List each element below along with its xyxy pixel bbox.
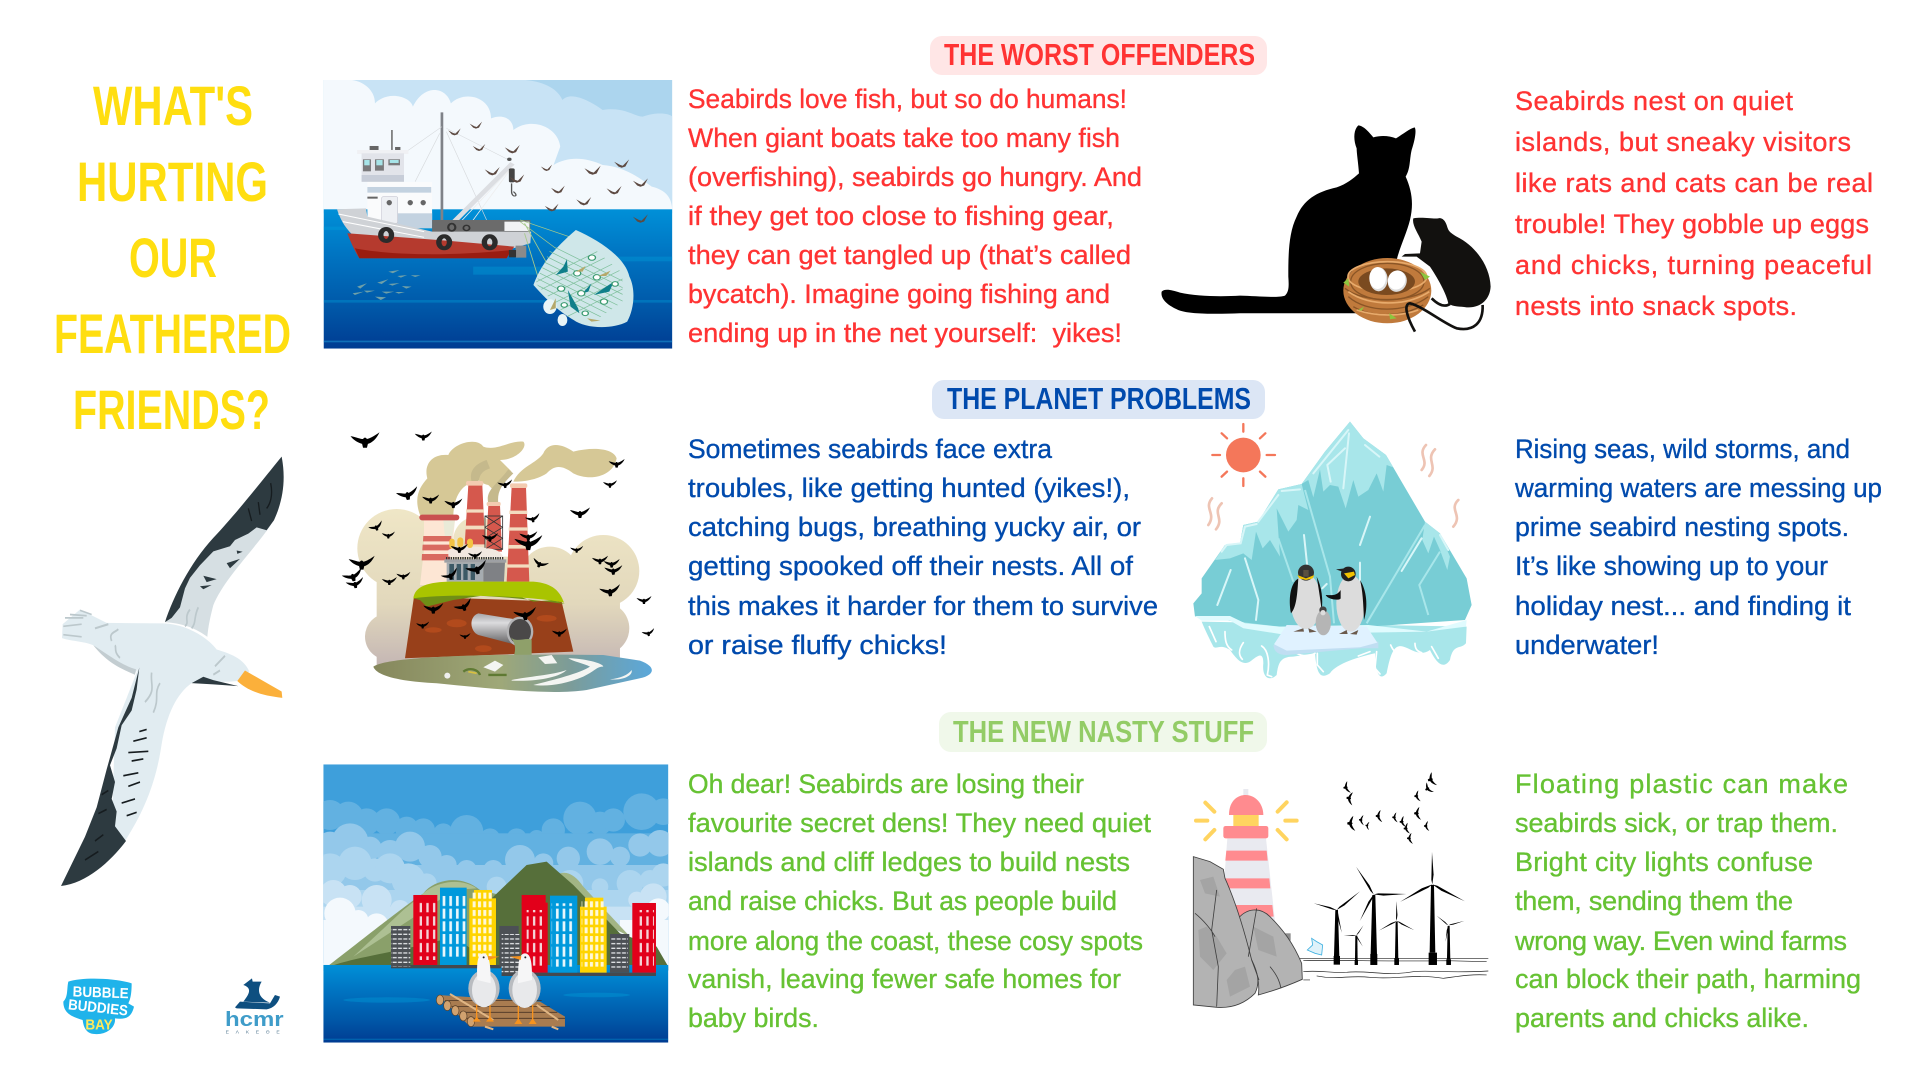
- illustration: coastal city and gulls on a raft: [313, 764, 677, 1043]
- net: [520, 220, 634, 337]
- penguins: [1290, 565, 1366, 635]
- sun: [1212, 424, 1275, 486]
- text: human pressures: Sometimes seabirds face extra: [688, 434, 1053, 464]
- text: coastal development: islands and cliff ledges to build nests: [688, 847, 1130, 877]
- text: invasive predators: [1515, 86, 1873, 321]
- text: overfishing: Seabirds love fish, but so do humans!: [688, 84, 1127, 114]
- text: plastics, lights and wind farms: them, sending them the: [1515, 886, 1793, 916]
- title: WHAT'S: [93, 74, 253, 137]
- text: coastal development: more along the coast, these cosy spots: [688, 926, 1143, 956]
- heat waves: [1208, 445, 1458, 529]
- panel: the new nasty stuff: [313, 712, 1861, 1043]
- logo: Bubble Buddies Bay: BUDDIES: [67, 997, 129, 1020]
- text: coastal development: and raise chicks. But as people build: [688, 886, 1117, 916]
- text: plastics, lights and wind farms: parents and chicks alike.: [1515, 1003, 1809, 1033]
- boat: [337, 112, 531, 258]
- text: human pressures: getting spooked off their nests. All of: [688, 551, 1134, 581]
- text: plastics, lights and wind farms: wrong way. Even wind farms: [1514, 926, 1847, 956]
- text: plastics, lights and wind farms: can block their path, harming: [1515, 964, 1861, 994]
- text: overfishing: ending up in the net yourself: yikes!: [688, 318, 1122, 348]
- illustration: lighthouse, wind farm and birds: [1193, 772, 1488, 1007]
- panel: the worst offenders: [324, 36, 1873, 349]
- heading pill: THE NEW NASTY STUFF: [953, 714, 1254, 749]
- text: climate change: holiday nest... and finding it: [1515, 591, 1852, 621]
- title: [54, 74, 291, 441]
- text: overfishing: bycatch). Imagine going fishing and: [688, 279, 1110, 309]
- flock of birds: [1342, 772, 1437, 844]
- gulls: [448, 122, 648, 223]
- text: climate change: It’s like showing up to your: [1515, 551, 1828, 581]
- title: FEATHERED: [54, 302, 291, 365]
- text: climate change: [1514, 434, 1882, 660]
- text: coastal development: Oh dear! Seabirds are losing their: [688, 769, 1084, 799]
- plastic bag: [1307, 938, 1323, 955]
- illustration: melting iceberg and penguins: [1193, 422, 1472, 678]
- text: invasive predators: trouble! They gobble up eggs: [1515, 209, 1869, 239]
- heading pill: THE WORST OFFENDERS: [944, 37, 1255, 72]
- text: plastics, lights and wind farms: seabirds sick, or trap them.: [1515, 808, 1838, 838]
- text: invasive predators: and chicks, turning peaceful: [1515, 250, 1872, 280]
- ice drips: [1202, 622, 1467, 678]
- text: human pressures: this makes it harder for them to survive: [688, 591, 1158, 621]
- soil and grass: [405, 597, 573, 658]
- sea: [1300, 958, 1488, 980]
- illustration: cat, rat and nest: [1161, 125, 1491, 332]
- refinery block: [444, 537, 506, 582]
- ice floe: [1273, 642, 1378, 655]
- text: plastics, lights and wind farms: [1514, 769, 1861, 1033]
- text: coastal development: [688, 769, 1151, 1033]
- text: human pressures: [688, 434, 1158, 660]
- text: plastics, lights and wind farms: Bright city lights confuse: [1515, 847, 1813, 877]
- text: coastal development: vanish, leaving fewer safe homes for: [688, 964, 1121, 994]
- logo: Bubble Buddies Bay: BAY: [85, 1017, 113, 1033]
- text: human pressures: troubles, like getting hunted (yikes!),: [688, 473, 1130, 503]
- illustration: fishing boat and net: [324, 80, 672, 349]
- text: overfishing: (overfishing), seabirds go hungry. And: [688, 162, 1142, 192]
- illustration: albatross: [61, 457, 284, 886]
- text: climate change: prime seabird nesting spots.: [1515, 512, 1849, 542]
- text: climate change: Rising seas, wild storms, and: [1515, 434, 1850, 464]
- panel: the planet problems: [341, 380, 1882, 692]
- pipe: [471, 613, 523, 645]
- chimneys: [419, 481, 529, 585]
- title: HURTING: [77, 150, 268, 213]
- text: coastal development: favourite secret dens! They need quiet: [688, 808, 1151, 838]
- text: overfishing: [688, 84, 1142, 348]
- logo: hcmr: hcmr: [225, 1009, 284, 1031]
- text: plastics, lights and wind farms: Floating plastic can make: [1515, 769, 1848, 799]
- text: invasive predators: nests into snack spots.: [1515, 291, 1797, 321]
- gulls: [468, 953, 541, 1024]
- title: OUR: [129, 226, 217, 289]
- wind turbines: [1313, 852, 1465, 965]
- text: climate change: underwater!: [1515, 630, 1659, 660]
- illustration: polluting factory and birds: [341, 431, 655, 692]
- logo: Bubble Buddies Bay: [63, 979, 134, 1034]
- text: coastal development: baby birds.: [688, 1003, 819, 1033]
- text: human pressures: catching bugs, breathing yucky air, or: [688, 512, 1141, 542]
- logo: hcmr: [225, 978, 284, 1036]
- fish shoal: [353, 270, 421, 300]
- raft: [436, 994, 565, 1029]
- text: overfishing: When giant boats take too many fish: [688, 123, 1120, 153]
- polluted shore: [373, 655, 652, 692]
- iceberg: [1193, 422, 1472, 627]
- text: invasive predators: like rats and cats can be real: [1515, 168, 1873, 198]
- heading pill: THE PLANET PROBLEMS: [947, 381, 1251, 416]
- text: climate change: warming waters are messing up: [1514, 473, 1882, 503]
- title: FRIENDS?: [73, 378, 270, 441]
- text: overfishing: if they get too close to fishing gear,: [688, 201, 1114, 231]
- mountains: [560, 873, 630, 937]
- lighthouse: [1196, 789, 1297, 937]
- ice shelf: [1195, 616, 1467, 634]
- flock of birds: [341, 431, 655, 639]
- text: invasive predators: Seabirds nest on quiet: [1515, 86, 1793, 116]
- logo: hcmr: ΕΛΚΕΘΕ: [226, 1030, 280, 1036]
- text: invasive predators: islands, but sneaky visitors: [1515, 127, 1851, 157]
- buildings: [391, 888, 656, 976]
- text: human pressures: or raise fluffy chicks!: [688, 630, 947, 660]
- logo: Bubble Buddies Bay: BUBBLE: [72, 984, 129, 1002]
- text: overfishing: they can get tangled up (that’s called: [688, 240, 1131, 270]
- rocks: [1193, 857, 1302, 1007]
